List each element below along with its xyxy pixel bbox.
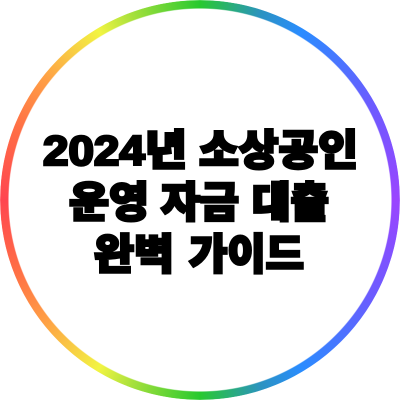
title line 2: 대출 xyxy=(252,179,329,226)
title line 3: 완벽 xyxy=(94,231,174,278)
title line 3 xyxy=(94,231,304,278)
title line 2: 자금 xyxy=(161,179,239,226)
title line 2: 운영 xyxy=(69,179,149,226)
title line 3: 가이드 xyxy=(189,231,304,278)
title line 2 xyxy=(69,179,329,226)
title line 1: 2024년 xyxy=(43,127,187,174)
title line 1 xyxy=(43,127,358,174)
title line 1: 소상공인 xyxy=(199,127,358,174)
